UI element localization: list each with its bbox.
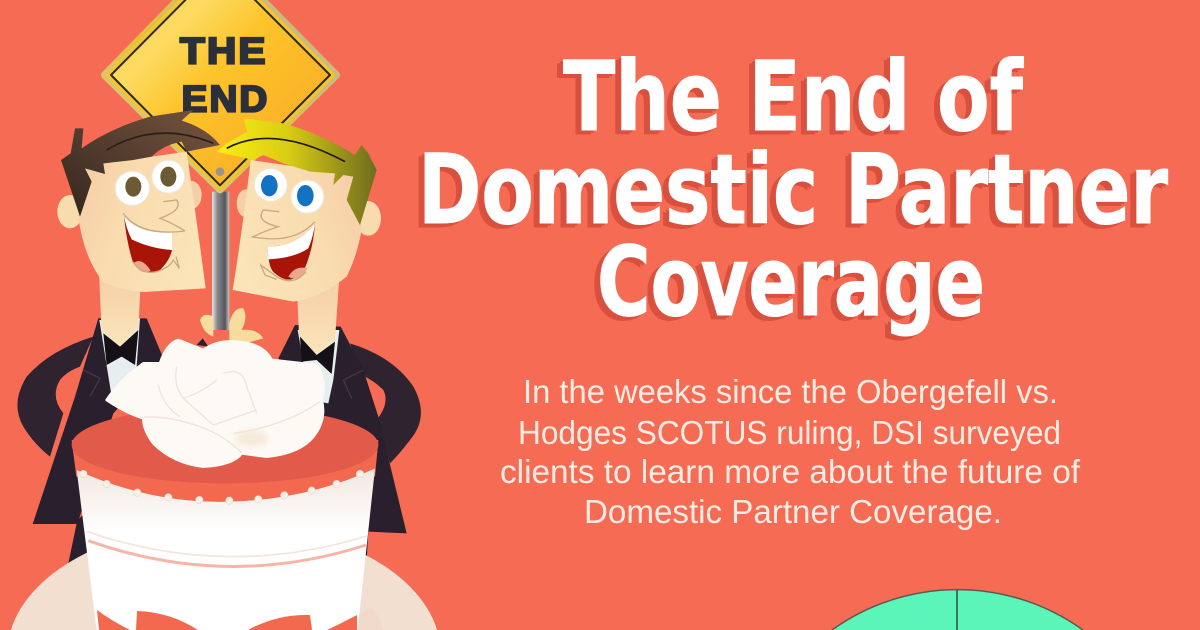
left jacket	[33, 318, 163, 524]
right corner band	[327, 615, 357, 630]
right ear	[356, 201, 381, 236]
orange band under top	[72, 443, 378, 502]
illustration: road sign on pole	[105, 0, 336, 330]
blond hair	[217, 118, 377, 225]
sign inner border	[111, 0, 330, 185]
rose petal lines	[143, 367, 320, 453]
right jacket	[278, 325, 407, 560]
pink ribbon lines	[87, 532, 367, 566]
intro paragraph: Hodges SCOTUS ruling, DSI surveyed	[518, 414, 1061, 451]
pearls	[80, 470, 364, 504]
sign rim	[105, 0, 336, 189]
cake bottom corners and bow	[97, 610, 357, 630]
intro paragraph	[500, 373, 1081, 530]
face	[233, 160, 362, 302]
left ear	[57, 195, 83, 228]
title shadow near	[415, 43, 1166, 340]
right bow tie	[300, 337, 335, 374]
title text: The End of	[563, 41, 1024, 153]
cake side	[72, 440, 378, 477]
white icing	[77, 468, 375, 630]
title shadow far: The End of	[557, 45, 1018, 157]
title	[412, 41, 1169, 342]
sign bolt	[216, 167, 224, 176]
left neck	[98, 250, 142, 347]
green pie chart top	[832, 590, 1083, 630]
sign text: END: END	[182, 78, 269, 120]
mouth	[123, 200, 185, 272]
left shirt	[99, 318, 140, 397]
hair line	[107, 133, 213, 150]
far ear	[182, 181, 202, 209]
intro paragraph: In the weeks since the Obergefell vs.	[523, 373, 1058, 410]
illustration: wedding cake	[11, 407, 437, 630]
sign text: THE: THE	[180, 29, 268, 71]
right bow loop	[248, 615, 312, 630]
title text: Coverage	[597, 226, 985, 338]
left corner band	[97, 610, 130, 630]
jacket lapels	[83, 370, 363, 398]
left bow tie	[103, 330, 138, 365]
brown hair	[61, 110, 220, 217]
title shadow far	[412, 45, 1163, 342]
left bow loop	[136, 611, 198, 630]
right neck	[296, 257, 341, 355]
illustration: grooms' heads	[57, 110, 381, 302]
white rose	[107, 338, 323, 467]
right groom head	[217, 118, 381, 302]
hand behind rose	[200, 308, 263, 347]
intro paragraph: Domestic Partner Coverage.	[584, 493, 1002, 530]
sign face	[107, 0, 333, 188]
cake plate	[11, 523, 437, 630]
title text	[418, 41, 1169, 338]
mouth	[252, 210, 315, 281]
plate shadow	[353, 608, 383, 630]
rose shading	[235, 430, 268, 447]
hair line	[227, 138, 345, 162]
right shirt	[298, 330, 339, 403]
title shadow near: The End of	[560, 43, 1021, 155]
collar tip behind rose	[197, 338, 208, 347]
rose silhouette	[107, 340, 323, 467]
eyes	[115, 160, 185, 206]
cake top	[72, 407, 378, 483]
eyes	[254, 168, 324, 213]
pole	[212, 192, 229, 330]
right arm	[350, 343, 421, 463]
illustration: grooms' bodies	[17, 250, 421, 563]
left jacket tail	[68, 500, 100, 563]
left arm	[17, 337, 93, 457]
left groom head	[57, 110, 220, 292]
intro paragraph: clients to learn more about the future of	[500, 453, 1081, 490]
title shadow far: Coverage	[591, 230, 979, 342]
face	[78, 152, 206, 292]
far ear	[237, 189, 255, 217]
title shadow near: Coverage	[594, 228, 982, 340]
